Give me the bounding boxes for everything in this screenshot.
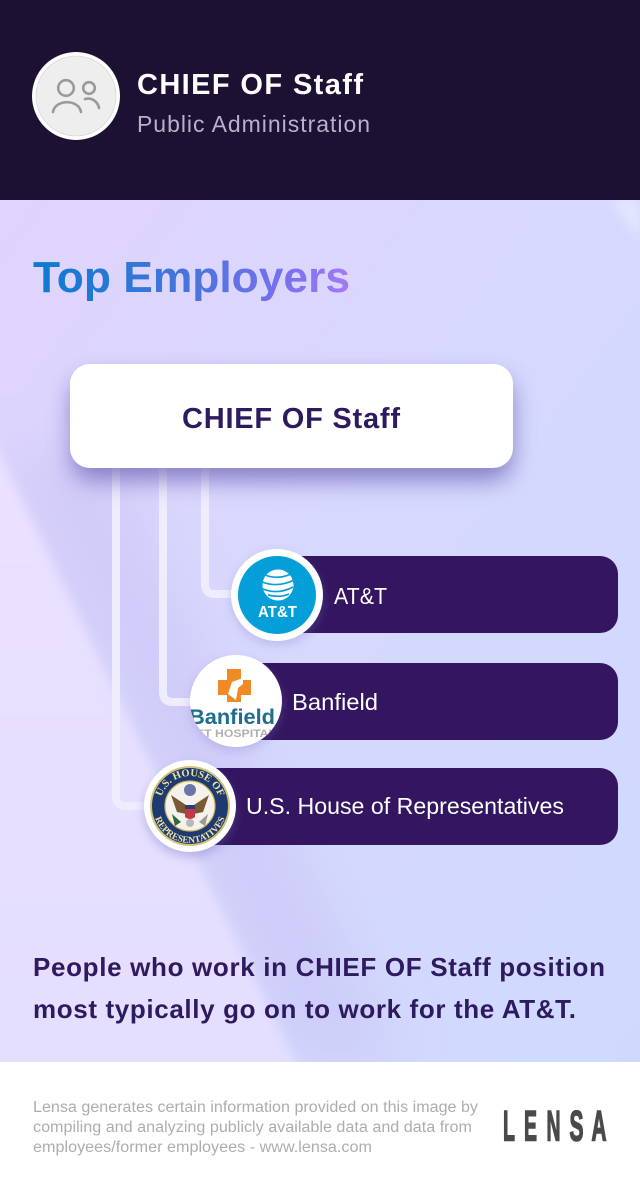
footer: A: [592, 1102, 606, 1150]
employer: AT&T: [231, 549, 618, 645]
footer: [0, 1062, 640, 1190]
summary text: [33, 952, 605, 1024]
icon: House seal: [140, 760, 238, 861]
icon: Banfield logo: Banfield: [189, 706, 275, 729]
employer: Banfield: Banfield: [292, 689, 378, 715]
icon: Banfield logo: ET HOSPITAL: [196, 728, 276, 740]
card: role: CHIEF OF Staff: [182, 403, 400, 435]
icon: House seal: U.S. HOUSE OF: [155, 769, 225, 795]
summary text: People who work in CHIEF OF Staff position: [33, 952, 605, 982]
header band: [0, 0, 640, 200]
icon: House seal: REPRESENTATIVES: [155, 816, 224, 844]
employer: Banfield: [189, 655, 618, 751]
panel: gradient background: [0, 200, 640, 1092]
icon: Banfield logo: [189, 655, 282, 751]
employer: U.S. House of Representatives: U.S. House of Representatives: [246, 793, 564, 819]
disclaimer text: [33, 1099, 478, 1156]
logo: LENSA: L: [503, 1102, 515, 1150]
logo: LENSA: E: [524, 1102, 537, 1150]
header title: CHIEF OF Staff: [137, 69, 363, 101]
logo: LENSA: N: [546, 1102, 560, 1150]
logo: LENSA: S: [570, 1102, 584, 1150]
icon: avatar with people: [32, 52, 120, 140]
disclaimer text: Lensa generates certain information provided on this image by: [33, 1099, 478, 1116]
icon: AT&T logo: AT&T: [258, 604, 297, 621]
employer: U.S. House of Representatives: [140, 760, 618, 861]
connector lines: [116, 468, 235, 806]
disclaimer text: employees/former employees - www.lensa.com: [33, 1139, 372, 1156]
disclaimer text: compiling and analyzing publicly available data and data from: [33, 1119, 472, 1136]
logo: LENSA: [503, 1102, 606, 1150]
summary text: most typically go on to work for the AT&T.: [33, 994, 576, 1024]
employer: AT&T: AT&T: [334, 583, 387, 609]
icon: AT&T logo: [231, 549, 323, 645]
card: role: [70, 364, 513, 480]
heading: Top Employers: Top Employers: [33, 253, 350, 302]
header subtitle: Public Administration: [137, 111, 370, 137]
